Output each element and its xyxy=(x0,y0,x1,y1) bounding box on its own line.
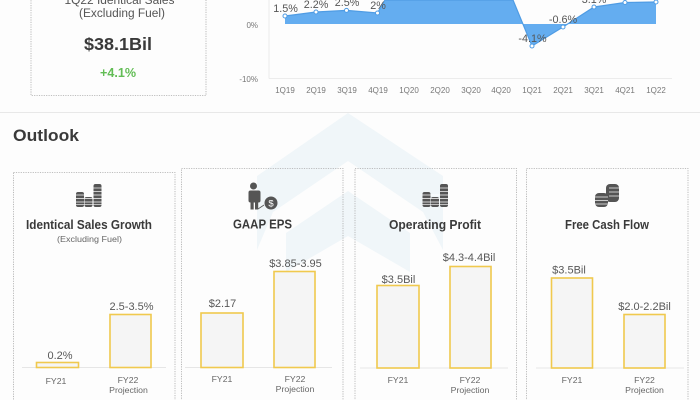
axis labels: FY21 xyxy=(46,376,67,386)
axis labels xyxy=(562,375,664,395)
x axis labels: 1Q22 xyxy=(646,86,666,95)
x axis labels: 1Q19 xyxy=(275,86,295,95)
x axis labels: 3Q21 xyxy=(584,86,604,95)
y axis labels: 0% xyxy=(246,21,258,30)
x axis labels: 2Q19 xyxy=(306,86,326,95)
value labels: $3.5Bil xyxy=(552,264,586,276)
value labels: $3.85-3.95 xyxy=(269,258,322,270)
data labels xyxy=(273,0,607,45)
axis labels: FY22 xyxy=(118,375,139,385)
area chart: quarterly identical sales growth xyxy=(239,0,672,95)
value labels: $3.5Bil xyxy=(382,274,415,286)
x axis labels: 1Q20 xyxy=(399,86,419,95)
KPI value: $38.1Bil xyxy=(84,34,152,54)
growth line xyxy=(285,0,656,46)
watermark: double chevron xyxy=(257,113,443,272)
panel: free cash flow xyxy=(526,168,688,400)
bar: FY22 projection xyxy=(110,314,151,368)
icon: coin stacks xyxy=(76,184,102,207)
value labels: 0.2% xyxy=(47,350,73,362)
x axis labels: 2Q20 xyxy=(430,86,450,95)
axis labels: Projection xyxy=(625,385,664,395)
axis labels: FY21 xyxy=(388,375,409,385)
x axis labels: 3Q20 xyxy=(461,86,481,95)
value labels xyxy=(382,252,495,286)
axis labels xyxy=(212,374,314,394)
value labels: $4.3-4.4Bil xyxy=(443,252,495,264)
panel: operating profit xyxy=(355,168,516,400)
data labels: 1.5% xyxy=(273,3,298,15)
y axis labels: -10% xyxy=(239,75,258,84)
title: Operating Profit xyxy=(389,218,482,232)
data points xyxy=(283,0,658,48)
subtitle: (Excluding Fuel) xyxy=(57,234,122,244)
axis labels: FY22 xyxy=(460,375,481,385)
y axis labels xyxy=(239,21,258,84)
panel: identical sales growth xyxy=(14,172,175,400)
KPI change: +4.1% xyxy=(100,66,136,80)
data labels: -0.6% xyxy=(549,14,577,26)
bar: FY22 projection xyxy=(450,266,491,368)
dollar sign: $ xyxy=(268,198,274,210)
value labels: 2.5-3.5% xyxy=(109,301,154,313)
value labels xyxy=(552,264,671,313)
axis labels xyxy=(388,375,489,395)
axis labels: FY22 xyxy=(634,375,655,385)
x axis labels: 1Q21 xyxy=(522,86,542,95)
x axis labels: 2Q21 xyxy=(553,86,573,95)
x axis labels: 4Q19 xyxy=(368,86,388,95)
axis labels: FY21 xyxy=(212,374,233,384)
KPI sublabel: (Excluding Fuel) xyxy=(79,8,165,20)
value labels xyxy=(209,258,322,310)
bar: FY21 xyxy=(377,286,419,368)
title: Free Cash Flow xyxy=(565,218,649,232)
value labels: $2.0-2.2Bil xyxy=(618,301,671,313)
bar: FY21 xyxy=(36,362,78,368)
bar: FY22 projection xyxy=(624,314,665,368)
icon: two coin stacks xyxy=(595,184,619,207)
value labels: $2.17 xyxy=(209,298,236,310)
bar: FY21 xyxy=(201,313,243,368)
growth area xyxy=(285,0,656,46)
bar: FY21 xyxy=(552,278,592,368)
x axis labels xyxy=(275,86,666,95)
heading: Outlook: Outlook xyxy=(13,126,80,145)
x axis labels: 3Q19 xyxy=(337,86,357,95)
axis labels: Projection xyxy=(276,384,314,394)
title: Identical Sales Growth xyxy=(26,218,152,232)
icon: coin stacks xyxy=(422,184,448,207)
icon: person with dollar coin xyxy=(248,182,278,210)
x axis labels: 4Q21 xyxy=(615,86,635,95)
axis labels: FY22 xyxy=(285,374,306,384)
axis labels: Projection xyxy=(109,385,148,395)
value labels xyxy=(47,301,154,362)
axis labels xyxy=(46,375,148,395)
panel: identical sales KPI xyxy=(31,0,206,96)
panel: GAAP EPS xyxy=(182,168,343,400)
axis labels: Projection xyxy=(451,385,489,395)
title: GAAP EPS xyxy=(233,218,292,232)
axis labels: FY21 xyxy=(562,375,583,385)
data labels: -4.1% xyxy=(518,33,547,45)
x axis labels: 4Q20 xyxy=(491,86,511,95)
data labels: 2% xyxy=(370,0,386,12)
bar: FY22 projection xyxy=(274,272,315,368)
